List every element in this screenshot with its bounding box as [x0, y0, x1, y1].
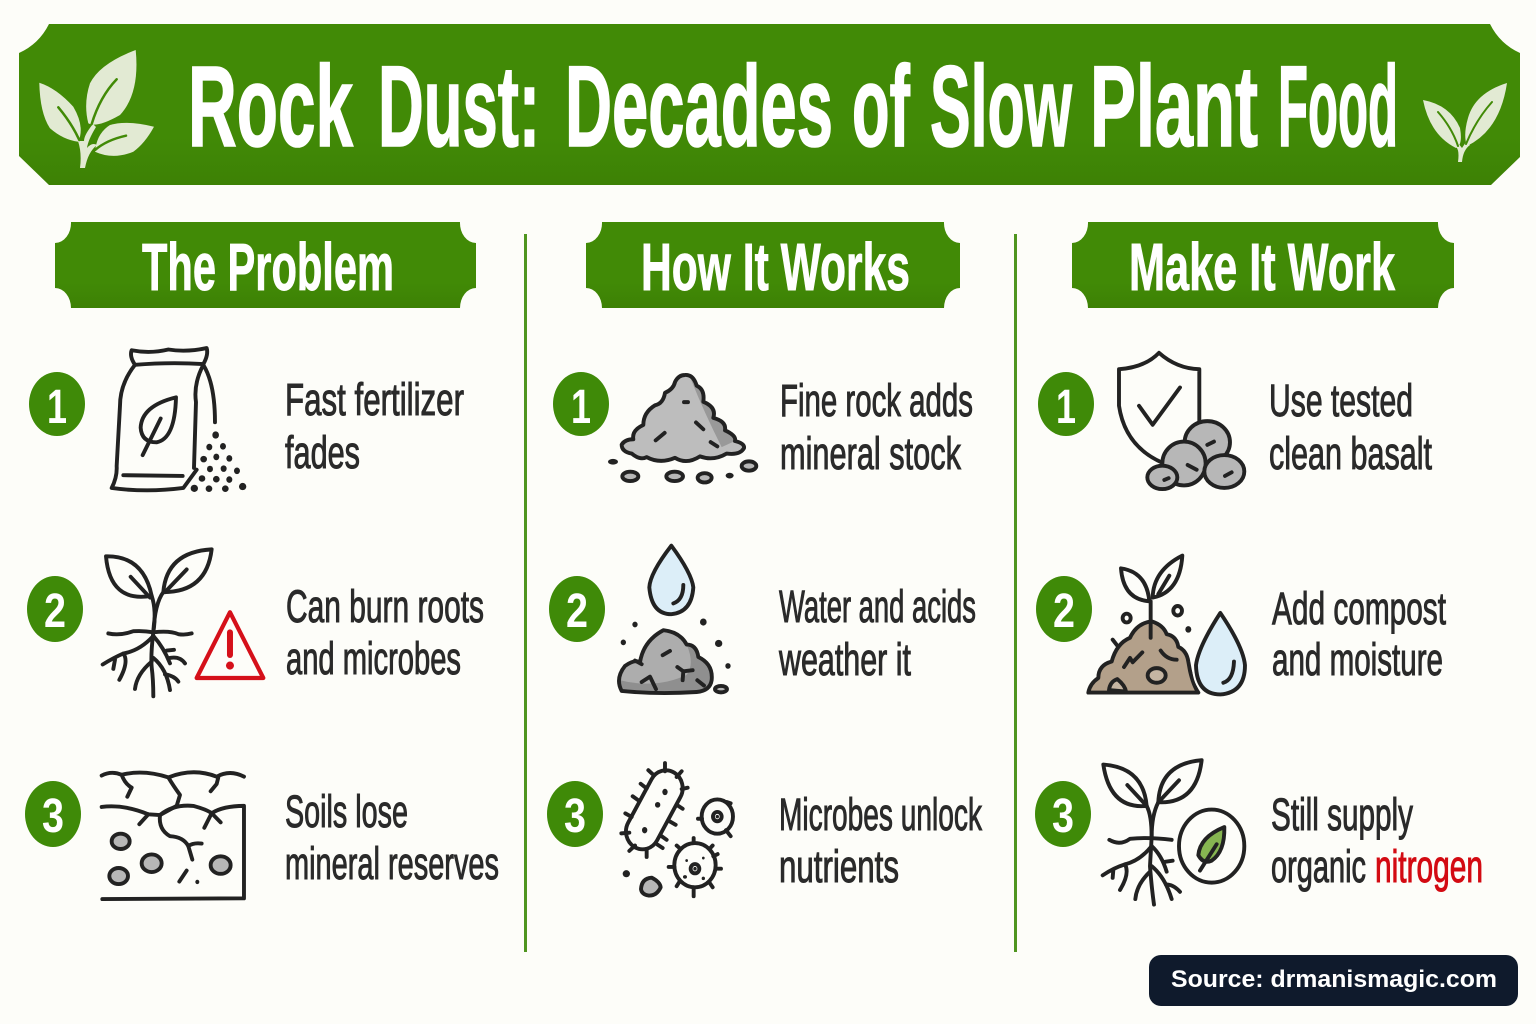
text: microbes unlock nutrients	[779, 789, 982, 892]
title text: Decades	[565, 43, 833, 171]
text: fine rock adds mineral stock: mineral stock	[780, 428, 961, 479]
number badge 2: 2	[1053, 585, 1075, 638]
icon: depleted cracked soil	[102, 772, 244, 899]
text: fast fertilizer fades	[285, 374, 464, 478]
icon: plant with warning	[103, 549, 263, 696]
icon: water drop on rock	[619, 546, 731, 693]
heading: Make It Work: Make It Work	[1129, 230, 1395, 305]
text: soils lose mineral reserves	[285, 786, 499, 889]
number badge 1	[1038, 372, 1094, 436]
icon: right leaves	[1423, 83, 1507, 162]
text: can burn roots: and microbes	[286, 633, 461, 684]
number badge 3	[547, 781, 603, 847]
number badge 3: 3	[1052, 790, 1074, 843]
number badge 1	[29, 372, 85, 436]
heading: How It Works	[586, 222, 960, 308]
title text: of	[852, 43, 910, 171]
text: water and acids weather it	[778, 581, 976, 685]
text: still supply organic nitrogen: nitrogen	[1375, 841, 1483, 892]
title text: Plant	[1090, 43, 1258, 171]
heading: How It Works: How It Works	[641, 230, 910, 305]
icon: left leaves	[39, 50, 154, 168]
heading: Make It Work	[1072, 222, 1454, 308]
text: use tested clean basalt	[1269, 375, 1432, 479]
source badge	[1149, 955, 1518, 1006]
number badge 3: 3	[564, 790, 586, 843]
number badge 2	[27, 576, 83, 642]
text: fast fertilizer fades: Fast fertilizer	[285, 374, 464, 425]
icon: microbes	[620, 763, 733, 896]
icon: shield with basalt rocks	[1119, 353, 1244, 489]
source badge: Source: drmanismagic.com	[1171, 966, 1497, 993]
text: can burn roots: Can burn roots	[286, 581, 484, 632]
number badge 1: 1	[571, 381, 591, 434]
title text	[188, 43, 1398, 171]
number badge 2	[1036, 576, 1092, 642]
number badge 1	[553, 372, 609, 436]
text: still supply organic nitrogen: organic	[1271, 841, 1366, 892]
icon: warning triangle	[197, 612, 263, 678]
text: fine rock adds mineral stock: Fine rock adds	[780, 375, 973, 426]
panel: how it works	[547, 372, 982, 896]
title text: Rock	[188, 43, 354, 171]
text: fast fertilizer fades: fades	[285, 427, 360, 478]
heading: The Problem	[55, 222, 476, 308]
number badge 3	[1035, 781, 1091, 847]
number badge 1: 1	[1056, 381, 1076, 434]
title text: Dust:	[378, 43, 540, 171]
text: water and acids weather it: Water and acids	[779, 581, 976, 632]
number badge 2: 2	[44, 585, 66, 638]
icon: fertilizer bag	[112, 348, 246, 492]
icon: rock dust pile	[608, 375, 756, 482]
heading: The Problem: The Problem	[142, 230, 394, 305]
panel: the problem	[25, 348, 499, 899]
icon: compost and moisture	[1088, 556, 1245, 694]
number badge 1: 1	[47, 381, 67, 434]
text: soils lose mineral reserves: mineral reserves	[285, 838, 499, 889]
text: fine rock adds mineral stock	[780, 375, 973, 479]
panel: make it work	[1035, 353, 1483, 905]
number badge 2	[549, 576, 605, 642]
text: water and acids weather it: weather it	[778, 634, 911, 685]
text: microbes unlock nutrients: nutrients	[779, 841, 899, 892]
text: microbes unlock nutrients: Microbes unlock	[779, 789, 982, 840]
text: soils lose mineral reserves: Soils lose	[285, 786, 408, 837]
text: add compost and moisture: and moisture	[1272, 634, 1443, 685]
icon: plant with organic leaf badge	[1103, 760, 1244, 905]
text: add compost and moisture: Add compost	[1272, 583, 1446, 634]
text: use tested clean basalt: Use tested	[1269, 375, 1413, 426]
text: still supply organic nitrogen: Still supply	[1271, 789, 1413, 840]
number badge 3: 3	[42, 790, 64, 843]
column divider 2	[1014, 234, 1017, 952]
title text: Slow	[930, 43, 1072, 171]
text: add compost and moisture	[1272, 583, 1446, 685]
text: use tested clean basalt: clean basalt	[1269, 428, 1432, 479]
text: can burn roots	[286, 581, 484, 684]
number badge 3	[25, 781, 81, 847]
title banner	[19, 24, 1520, 185]
number badge 2: 2	[566, 585, 588, 638]
column divider 1	[524, 234, 527, 952]
text: still supply organic nitrogen	[1271, 789, 1483, 892]
